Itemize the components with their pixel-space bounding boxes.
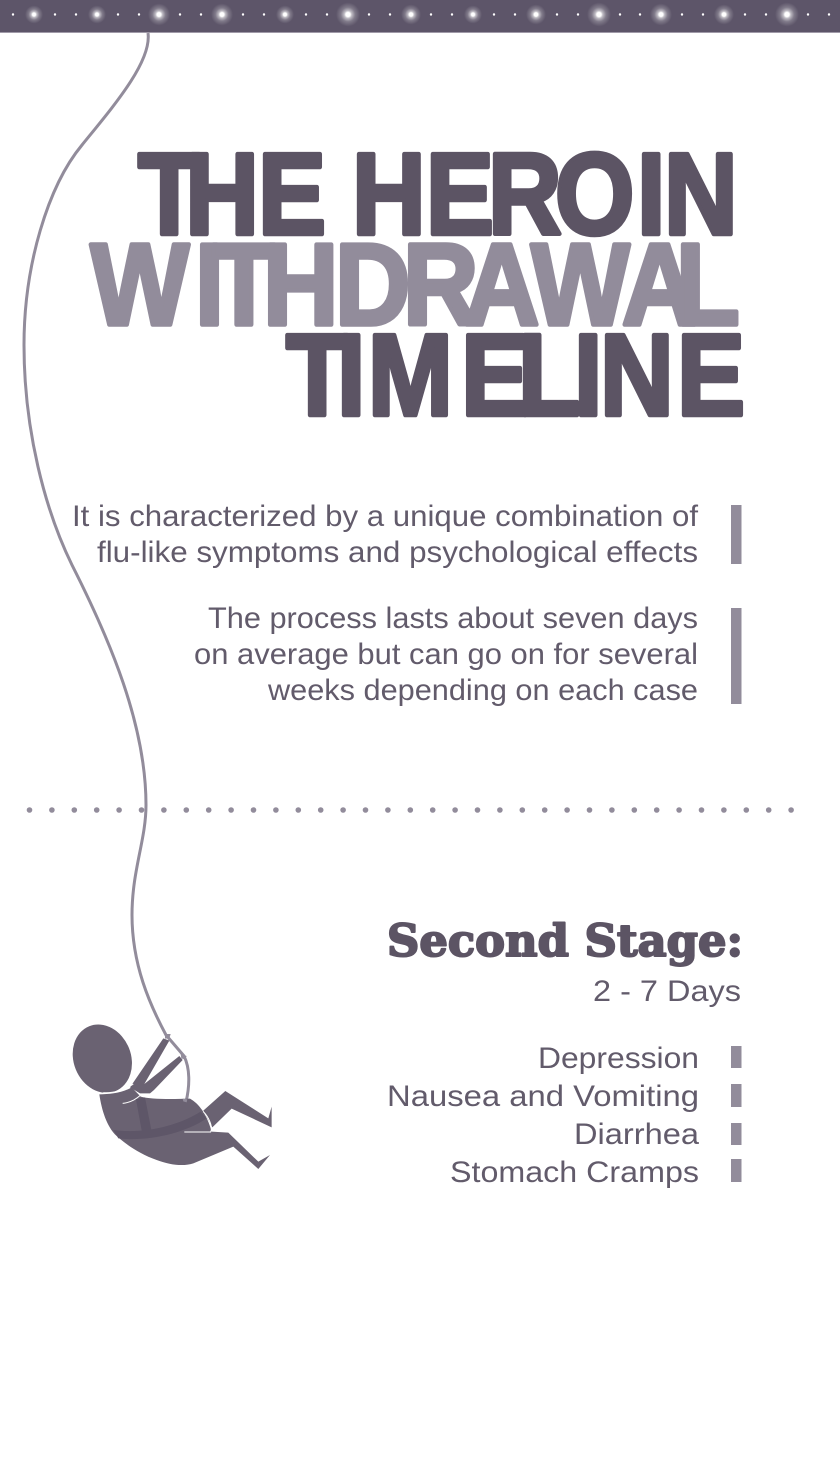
intro paragraph one: flu-like symptoms and psychological effects [97,536,698,569]
head [63,1015,142,1102]
intro paragraph two [194,602,698,707]
symptom: Stomach Cramps: Stomach Cramps [450,1156,699,1189]
top band with lights [0,0,840,33]
title line: WITHDRAWAL: WITHDRAWAL [91,220,740,350]
rope [24,33,189,1102]
bar accent one [731,505,742,564]
back leg [203,1091,272,1127]
intro paragraph one [72,500,699,569]
rope knots [165,1034,187,1102]
intro paragraph two: The process lasts about seven days [208,602,698,635]
dotted divider [27,807,794,813]
intro paragraph two: weeks depending on each case [267,674,698,707]
bar accent two [731,608,742,704]
harness [113,1097,207,1139]
title line: TIMELINE: TIMELINE [286,311,745,440]
title [91,130,745,440]
harness highlights [103,1084,211,1132]
symptom list [387,1042,699,1189]
symptom: Depression: Depression [538,1042,699,1075]
symptom bullets [731,1046,742,1182]
intro paragraph one: It is characterized by a unique combination of [72,500,699,533]
heading: Second Stage: Second Stage: [387,916,743,967]
symptom: Diarrhea: Diarrhea [574,1118,699,1151]
intro paragraph two: on average but can go on for several [194,638,698,671]
arms [130,1038,183,1093]
subheading: duration: 2 - 7 Days [593,975,741,1008]
symptom: Nausea and Vomiting: Nausea and Vomiting [387,1080,699,1113]
title line: THE HEROIN: THE HEROIN [138,130,738,259]
figure hanging from rope [63,1015,272,1169]
body [99,1087,270,1169]
